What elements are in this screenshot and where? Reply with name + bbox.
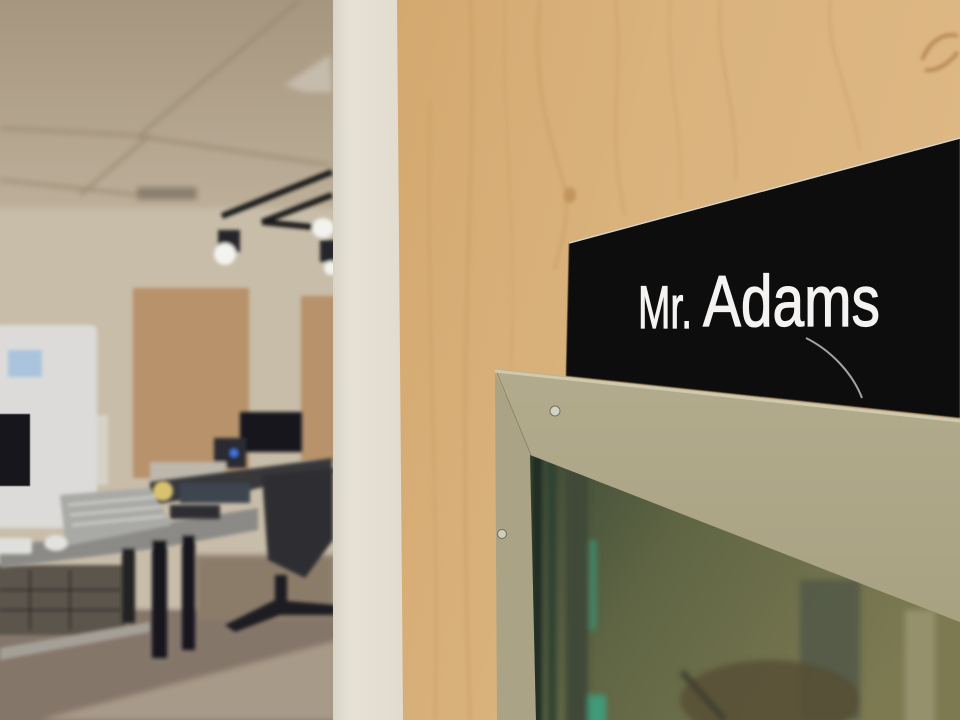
- frame side: [495, 372, 538, 720]
- wood knots: [564, 187, 576, 203]
- frame top: [495, 369, 960, 622]
- floor behind desk: [195, 555, 335, 620]
- panel: black name plate: [566, 138, 960, 418]
- name text: [638, 262, 880, 342]
- glass reflections: [532, 455, 935, 720]
- whiteboard: [0, 325, 108, 528]
- panel: wooden door: [397, 0, 960, 720]
- panel: window glass: [525, 450, 960, 720]
- panel: white door jamb: [333, 0, 403, 720]
- name text: Mr.: [638, 274, 692, 341]
- track lights: [214, 172, 338, 275]
- mixing console: [60, 481, 250, 546]
- back wall: [0, 195, 340, 615]
- frame mitre shadow: [497, 373, 531, 455]
- name text: Adams: [703, 262, 880, 342]
- frame highlight: [495, 371, 960, 421]
- under-desk cables: [0, 565, 150, 660]
- plate top edge highlight: [569, 138, 960, 243]
- wooden door right: [301, 296, 337, 461]
- ceiling: [0, 0, 340, 208]
- wooden door left: [133, 288, 249, 478]
- screw top: [550, 406, 560, 416]
- office chair: [225, 468, 335, 632]
- desk: [0, 458, 332, 658]
- wood grain: [429, 0, 860, 720]
- floor: [0, 610, 340, 720]
- monitors at back: [150, 412, 302, 482]
- keyboard and mouse: [0, 535, 68, 554]
- monitor on left: [0, 414, 30, 486]
- panel: window frame: [495, 369, 960, 720]
- scratch: [806, 338, 862, 398]
- panel: blurred studio room: [0, 0, 340, 720]
- screw side: [498, 530, 506, 538]
